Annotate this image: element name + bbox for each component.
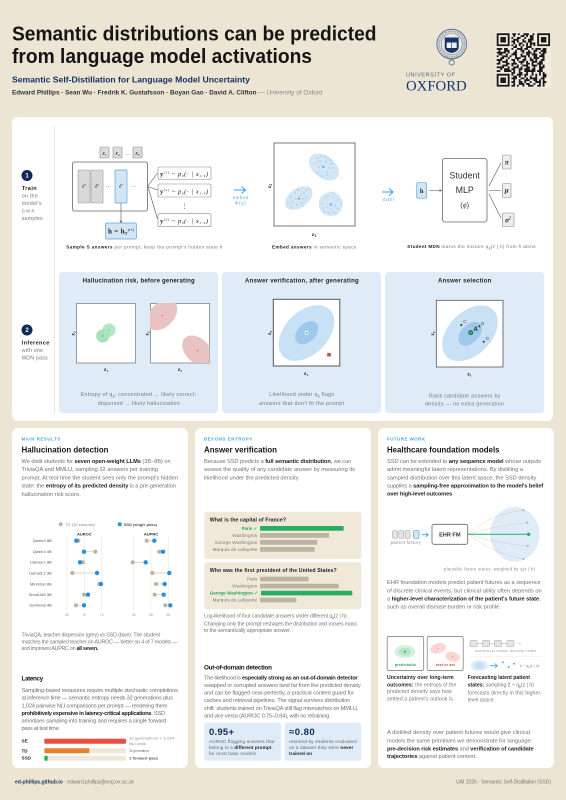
input tokens: x [115, 151, 118, 157]
sample boxes: ~ p [170, 171, 182, 178]
plot: predictable: predictable [395, 663, 416, 667]
question card: president: Marquis de Lafayette [213, 598, 258, 603]
authors: Edward Phillips · Sean Wu · Fredrik K. Gustafsson · Boyan Gao · David A. Clifton — University of Oxford [12, 91, 322, 97]
out-of-domain text: shift: students trained on TriviaQA still flag mismatches on MMLU, [204, 706, 359, 712]
axis labels: 1 [314, 234, 316, 238]
latency bars: NLI calls [129, 741, 146, 746]
chart caption: ϕ [332, 616, 334, 620]
latency text: at inference time — semantic entropy needs 32 generations plus [22, 696, 173, 702]
step 2 label: inference: Inference [22, 340, 49, 346]
sample boxes: θ [182, 221, 184, 225]
sample boxes: (1) [164, 170, 170, 174]
chart: semantic embedding scatter: 2 [269, 184, 273, 186]
dumbbell chart: AUPRC [144, 532, 158, 536]
input tokens: x [135, 151, 138, 157]
caption: flags [320, 392, 334, 398]
chart: semantic embedding scatter: z [267, 186, 273, 188]
diagram: EHR foundation model: plausible future states, weighted by q(z | h) [444, 566, 536, 572]
output boxes: π [505, 158, 509, 166]
out-of-domain heading: Out-of-domain detection [204, 664, 272, 671]
axis ticks: 75 [100, 613, 104, 617]
plot: candidate ranking: 2 [432, 331, 436, 333]
step 1 label: train: own [22, 208, 34, 214]
latency text: prohibitively expensive in latency-critical applications. SSD [22, 711, 165, 717]
diagram: sampling from LLM [66, 147, 223, 249]
caption: density — no extra generation [425, 402, 504, 408]
legend: SSD (single pass) [124, 522, 158, 527]
caption: answers that don't fit the prompt [259, 401, 345, 407]
chart caption: (z | h). [334, 614, 348, 620]
SSD points [74, 538, 172, 608]
latency bars: SE [22, 739, 28, 744]
sample boxes: y [160, 188, 164, 196]
caption: dispersed → likely hallucination [98, 401, 180, 407]
caption: Rank candidate answers by [429, 394, 501, 400]
question card: France: What is the capital of France? [210, 518, 286, 524]
footer: venue: UAI 2026 · Semantic Self-Distillation (SSD) [456, 780, 551, 786]
panel: answer verification: Answer verification, after generating [245, 278, 359, 284]
plot: concentrated density: 2 [72, 331, 76, 333]
step 1 label: train: model's [22, 201, 42, 207]
out-of-domain text: The likelihood is especially strong as an out-of-domain detector: [204, 676, 359, 682]
latency text: 1,024 pairwise NLI comparisons per prompt — rendering them [22, 703, 168, 709]
question card: France: Paris ✓ [242, 526, 257, 531]
step 1 label: train [22, 170, 43, 222]
question card: president: Washington [232, 584, 258, 589]
out-of-domain text [204, 676, 361, 720]
row labels [29, 538, 52, 608]
dumbbell chart [29, 522, 173, 617]
plot: candidate ranking: C [463, 319, 467, 325]
stat card: 0.95+: 0.95+ [209, 727, 234, 738]
plot: likelihood density: 2 [269, 331, 273, 333]
caption: long-term outcomes: outcomes: the entropy of the [387, 682, 456, 688]
latency text: pass at test time. [22, 726, 61, 732]
input tokens: 1 [105, 153, 107, 157]
plot: candidate ranking [430, 295, 509, 378]
caption: Likelihood under q [269, 392, 317, 398]
output boxes: μ [504, 186, 509, 194]
language model box: ℓ [95, 184, 97, 190]
logo: University of Oxford [406, 29, 467, 94]
question card: France: Marquis de Lafayette [213, 547, 258, 552]
stat card: 0.80: on a dataset they were never [289, 745, 353, 750]
plot: dispersed density: z [144, 333, 150, 336]
axis ticks: 55 [149, 613, 153, 617]
chart caption: TriviaQA, teacher dispersion (grey) vs SSD (blue). The student [22, 633, 161, 639]
plot: dispersed density: 2 [146, 331, 150, 333]
plot: likelihood density: 1 [306, 373, 308, 377]
patient history [391, 531, 422, 545]
caption: latent states: ϕ [519, 685, 521, 689]
axis ticks: 45 [132, 613, 136, 617]
caption: latent states: states: sampling z̃ ~ q [468, 683, 519, 689]
student box: MLP [456, 185, 474, 195]
arrow: distil [382, 188, 394, 202]
output boxes: 2 [508, 216, 511, 220]
panel: hallucination risk [59, 272, 219, 413]
sample boxes: 1:T [199, 174, 206, 178]
caption: student MDN: (z | h) from h alone [491, 244, 536, 249]
plot: concentrated density: z [104, 367, 106, 373]
student box: Student [450, 171, 480, 181]
caption [259, 392, 345, 407]
language model box: ℓ [119, 184, 121, 190]
panel: answer selection: Answer selection [438, 278, 492, 284]
stat card: 0.80: retained by students evaluated [289, 739, 357, 744]
question card: France [204, 512, 361, 559]
caption: long-term outcomes [387, 675, 456, 702]
body text: such as overall disease burden or risk profile. [387, 604, 501, 610]
sample boxes: ⋮ [182, 204, 188, 210]
body text: likelihood under the predicted density. [204, 475, 300, 481]
chart caption: Log-likelihood of four candidate answers under different q [204, 614, 332, 620]
plot: concentrated density: z [70, 333, 76, 336]
sample boxes: ) [205, 171, 208, 178]
body text: hallucination risk score. [22, 492, 81, 498]
input tokens: T [138, 153, 141, 157]
sample boxes: θ [182, 192, 184, 196]
header title: Semantic distributions can be predicted [12, 23, 376, 45]
chart caption: Changing only the prompt reshapes the distribution and moves mass [204, 622, 357, 628]
stat card: 0.95+ [204, 723, 281, 761]
plot: candidate ranking: B [481, 321, 484, 327]
row labels: Qwen3 4B [33, 549, 52, 554]
input tokens: … [125, 151, 130, 157]
hidden state: (ℓ*) [128, 228, 135, 232]
caption [425, 394, 504, 408]
language model box: 1 [84, 183, 86, 187]
connectors [72, 541, 170, 605]
caption: ϕ [113, 394, 115, 398]
chart caption: and improves AUPRC on all seven. [22, 646, 99, 652]
out-of-domain text: and vice versa (AUROC 0.75–0.84), with no retraining. [204, 714, 331, 720]
diagram: EHR foundation model [391, 507, 540, 572]
QR code [496, 32, 551, 88]
caption: long-term outcomes: Uncertainty over long-term [387, 675, 454, 681]
logo: University of Oxford: UNIVERSITY OF [406, 73, 456, 79]
row labels: Llama3.2 3B [29, 570, 52, 575]
plot: candidate ranking: A [474, 327, 478, 333]
body text [22, 459, 178, 498]
closing text: models the same primitives we demonstrate for language: [387, 738, 533, 744]
caption: latent states: forecasts directly in this higher- [468, 691, 542, 697]
sample boxes: 1:T [199, 192, 206, 196]
sample boxes: ) [205, 188, 208, 196]
heading: Hallucination detection [22, 444, 108, 454]
question card: France: George Washington [215, 540, 258, 545]
TD points [70, 539, 167, 607]
caption: : concentrated → likely correct; [115, 392, 196, 398]
panel: answer selection [385, 272, 544, 413]
step 1 label: train: on the [22, 194, 38, 200]
sample boxes: (· | x [184, 218, 199, 225]
diagram: latent forecasting [470, 640, 541, 671]
body text [387, 459, 543, 498]
language model box [72, 162, 148, 211]
stat card: 0.95+: belong to a different prompt, [209, 745, 273, 750]
language model box: … [106, 183, 111, 189]
axis ticks: 70 [83, 613, 86, 617]
arrow: embed: embed [233, 195, 249, 200]
caption: latent states: (z | h) [521, 683, 534, 689]
arrow: embed: Φ(y) [235, 200, 246, 206]
latency bars: 32 generations + 1,024 [129, 735, 175, 740]
latency bars: 32 generations [129, 748, 149, 753]
row labels: Ministral 8B [30, 581, 52, 586]
question card: France: Washington [232, 533, 258, 538]
caption: ϕ [318, 394, 320, 398]
step 2 label: inference: with one [22, 348, 43, 354]
sample boxes: 1:T [199, 221, 206, 225]
body text: supplies a sampling-free approximation to the model's belief [387, 484, 543, 490]
plot: likelihood density [267, 294, 345, 377]
header title [12, 23, 376, 68]
closing text: A distilled density over patient futures would give clinical [387, 730, 530, 736]
arrow: embed [233, 186, 249, 206]
language model box: ℓ [82, 184, 84, 190]
diagram: latent forecasting: ϕ [528, 665, 530, 669]
body text: a higher-level characterization of the patient's future state, [387, 596, 541, 602]
caption: long-term outcomes: settled a patient's outlook is. [387, 696, 454, 702]
question card: president: George Washington ✓ [210, 591, 258, 596]
body text: TriviaQA and MMLU, sampling 32 answers per training [22, 467, 158, 473]
chart caption: to the semantically appropriate answer. [204, 628, 291, 634]
header title: from language model activations [12, 46, 312, 68]
arrow to hidden state [120, 203, 122, 222]
body text: over high-level outcomes. [387, 492, 454, 498]
sample boxes: (S) [164, 218, 170, 222]
row labels: Llama3.1 8B [30, 560, 52, 565]
latency bars: TD [22, 748, 28, 754]
latency bars: 1 forward pass [129, 755, 159, 760]
body text: assess the quality of any candidate answer by measuring its [204, 467, 355, 473]
latency text [22, 688, 178, 732]
hidden state input: h [420, 188, 424, 195]
step 1 label: train: samples [22, 216, 43, 222]
latency bars [22, 735, 175, 761]
sample boxes: (· | x [184, 188, 199, 196]
caption: student MDN: ϕ [489, 246, 491, 250]
stat card: 0.95+: for most base models [209, 751, 257, 756]
caption [81, 392, 196, 407]
heading: Answer verification [204, 444, 277, 454]
chart: semantic embedding scatter [267, 143, 357, 249]
question card: president: Paris [247, 577, 258, 582]
plot: dispersed density: z [178, 367, 180, 373]
sample boxes: y [160, 218, 164, 225]
subtitle: Semantic Self-Distillation for Language Model Uncertainty [12, 75, 250, 85]
EHR FM box: EHR FM [439, 532, 461, 538]
panel: future work [378, 428, 554, 768]
row labels: SmolLM3 3B [29, 592, 52, 597]
chart caption: matches the sampled teacher on AUROC — better on 4 of 7 models — [22, 640, 178, 646]
plot: candidate ranking: 1 [470, 374, 472, 378]
diagram: latent forecasting: (z | h) [530, 664, 539, 668]
body text [387, 580, 542, 610]
panel: hallucination risk: Hallucination risk, before generating [83, 278, 195, 284]
patient history: patient history [391, 540, 422, 545]
sample boxes: θ [182, 174, 184, 178]
plot: candidate ranking: z [467, 372, 470, 378]
future trajectories [468, 510, 528, 559]
hidden state: h = h [108, 228, 124, 236]
sample boxes: (· | x [184, 171, 199, 178]
logo: University of Oxford: OXFORD [406, 78, 467, 94]
arrows to samples [148, 173, 158, 219]
language model box: 2 [97, 183, 99, 187]
diagram: latent forecasting: event-level rollout: discrete codes [475, 649, 536, 653]
step 2 label: inference: 2 [25, 328, 29, 334]
plot: predictable [387, 636, 424, 670]
plot: likelihood density: z [267, 333, 273, 335]
sample boxes: (2) [164, 188, 170, 192]
input tokens: x [102, 151, 105, 157]
hidden state [106, 223, 136, 239]
plot: dispersed density [146, 303, 210, 372]
plot: dispersed density: 1 [180, 369, 182, 373]
body text [204, 459, 355, 481]
body text: sampled distribution over this latent space, the SSD density [387, 475, 536, 481]
axis ticks [65, 613, 170, 617]
output boxes: σ [505, 216, 509, 224]
step 2 label: inference [22, 324, 49, 361]
stat card: 0.80: ≈0.80 [289, 727, 315, 738]
panel: answer verification [222, 272, 381, 413]
closing text [387, 730, 534, 760]
diagram: student MLP [407, 155, 536, 250]
language model box: … [130, 183, 136, 189]
stat card: 0.80: trained on [289, 751, 312, 756]
chart caption [22, 633, 178, 652]
caption: sample answers: Sample S answers per prompt; keep the prompt's hidden state h [66, 244, 223, 249]
caption: long-term outcomes: predicted density says how [387, 689, 452, 695]
question card: president [204, 562, 361, 609]
latency heading: Latency [22, 676, 44, 683]
body text: of discrete clinical events, but clinical utility often depends on [387, 588, 542, 594]
stat card: 0.95+: AUROC flagging answers that [209, 739, 275, 744]
arrow: distil: distil [383, 197, 394, 202]
axis ticks: 65 [167, 613, 170, 617]
caption: latent states [468, 675, 542, 703]
plot: test or act [427, 636, 463, 670]
out-of-domain text: and can be flagged near-perfectly, a practical content guard for [204, 691, 354, 697]
chart caption [204, 614, 357, 634]
plot: test or act: test or act [436, 663, 456, 667]
sample boxes [158, 167, 211, 227]
diagram: latent forecasting: z̃ ~ q [520, 664, 528, 668]
sample boxes: ~ p [170, 218, 182, 225]
body text: We distil students for seven open-weight LLMs (3B–8B) on [22, 459, 171, 465]
caption: latent states: level space. [468, 697, 495, 703]
latency text: amortises sampling into training and requires a single forward [22, 718, 166, 724]
sample boxes: ~ p [170, 188, 182, 196]
plot: concentrated density: 1 [106, 369, 108, 373]
heading: Healthcare foundation models [387, 444, 500, 454]
latency text: Sampling-based measures require multiple stochastic completions [22, 688, 178, 694]
body text: state: the entropy of its predicted density is a pre-generation [22, 484, 176, 490]
input tokens: 2 [118, 153, 120, 157]
axis labels: z [312, 232, 314, 238]
plot: concentrated density [70, 304, 136, 373]
hidden state: T [125, 231, 128, 236]
step 2 label: inference: MDN pass [22, 355, 48, 361]
input tokens [100, 147, 142, 158]
caption: student MDN: Student MDN learns the mixture q [407, 244, 488, 249]
EHR FM box [432, 524, 468, 544]
legend [59, 522, 158, 527]
plot: candidate ranking: D [486, 336, 490, 342]
body text: EHR foundation models predict patient futures as a sequence [387, 580, 541, 586]
body text: SSD can be extended to any sequence model whose outputs [387, 459, 541, 465]
dumbbell chart: AUROC [77, 532, 92, 536]
footer: contact: ed-phillips.github.io · edward.phillips@eng.ox.ac.uk [15, 780, 134, 786]
panel: main results [12, 428, 188, 768]
eyebrow: FUTURE WORK [387, 436, 426, 441]
out-of-domain text: caches and retrieval pipelines. The signal survives distribution [204, 698, 350, 704]
panel: method overview [12, 117, 553, 421]
closing text: trajectories against patient context. [387, 754, 477, 760]
sample boxes: ) [205, 218, 208, 225]
panel: answer verification results [195, 428, 371, 768]
eyebrow: BEYOND ENTROPY [204, 436, 252, 441]
body text: admit meaningful latent representations. By distilling a [387, 467, 524, 473]
body text: Because SSD predicts a full semantic distribution, we can [204, 459, 351, 465]
output boxes [502, 155, 514, 226]
step 1 label: train: 1 [25, 174, 29, 180]
plot: likelihood density: z [304, 371, 306, 377]
sample boxes: y [160, 171, 164, 178]
out-of-domain text: swapped or corrupted answers land far from the predicted density [204, 683, 361, 689]
axis ticks: 65 [65, 613, 69, 617]
latency bars: SSD [22, 756, 32, 761]
caption: embed answers: Embed answers in semantic space [272, 244, 357, 249]
language model box: * [121, 183, 123, 187]
caption: Entropy of q [81, 392, 112, 398]
stat card: 0.80 [285, 723, 361, 761]
plot: candidate ranking: z [430, 333, 436, 336]
body text: prompt. At test time the student sees only the prompt's hidden [22, 475, 178, 481]
closing text: pre-decision risk estimates and verification of candidate [387, 746, 534, 752]
row labels: Qwen3 8B [33, 538, 52, 543]
student box: (ϕ) [460, 200, 470, 210]
legend: TD (32 samples) [65, 522, 96, 527]
step 1 label: train: Train [22, 186, 37, 192]
question card: president: Who was the first president of the United States? [210, 568, 337, 574]
student box [442, 158, 487, 222]
row labels: Gemma3 4B [29, 603, 52, 608]
eyebrow: MAIN RESULTS [22, 436, 60, 441]
caption: latent states: Forecasting latent patient [468, 675, 530, 681]
divider [54, 125, 56, 413]
